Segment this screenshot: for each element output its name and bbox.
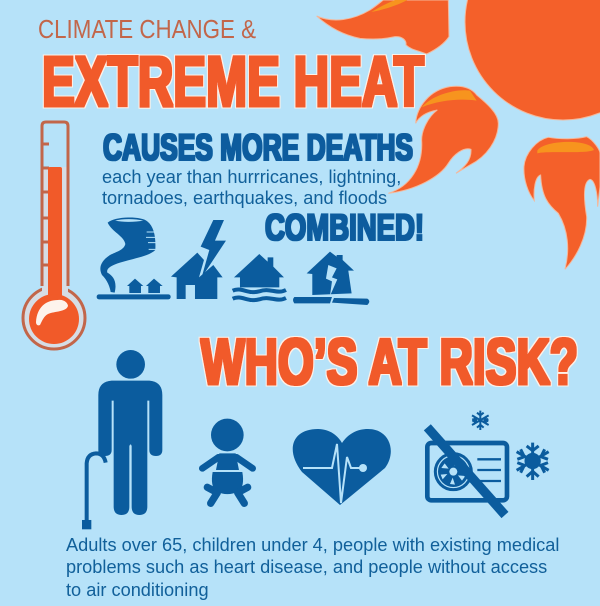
icon: lightning house <box>171 220 226 299</box>
icons: people at risk <box>82 350 253 529</box>
body text: who is at risk: problems such as heart disease, and people without access <box>66 557 547 577</box>
icon: small snowflake <box>472 411 489 430</box>
icon: no air conditioning <box>427 411 549 515</box>
icon: tornado <box>97 217 171 299</box>
body text: who is at risk: Adults over 65, children under 4, people with existing medical <box>66 535 559 555</box>
heading: causes more deaths: CAUSES MORE DEATHS <box>103 127 413 168</box>
icon: flood house <box>233 254 286 300</box>
heading: combined: COMBINED! <box>265 207 424 248</box>
title line: climate change: CLIMATE CHANGE & <box>38 14 256 44</box>
disaster icons <box>97 217 369 305</box>
icon: older adult with cane <box>82 350 162 529</box>
icon: earthquake house <box>293 252 369 305</box>
icon: baby <box>202 419 253 503</box>
thermometer icon <box>23 122 85 349</box>
icon: large snowflake <box>517 443 549 480</box>
sun with flames <box>317 0 600 269</box>
body text: who is at risk: to air conditioning <box>66 580 209 600</box>
title: extreme heat: EXTREME HEAT <box>42 43 424 122</box>
body text: deaths comparison: each year than hurrricanes, lightning, <box>102 167 401 187</box>
icon: heart with pulse <box>293 429 391 505</box>
body text: deaths comparison: tornadoes, earthquakes, and floods <box>102 188 387 208</box>
